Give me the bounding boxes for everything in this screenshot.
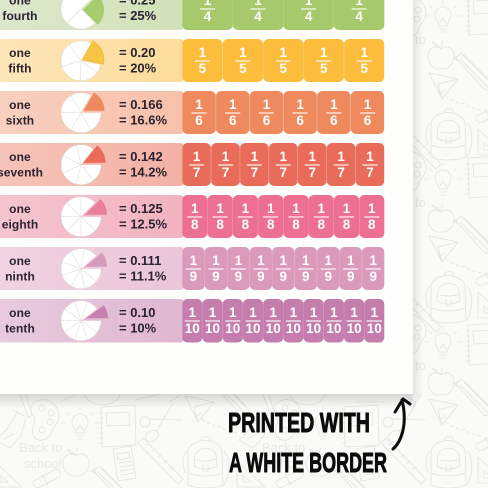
fraction bar: quarters xyxy=(182,0,384,30)
row: one seventh xyxy=(0,143,384,186)
fraction bar: tenths: 1 xyxy=(350,305,358,320)
pie: one eighth xyxy=(61,197,107,237)
fraction bar: tenths: 10 xyxy=(326,321,341,336)
background with school doodles: to xyxy=(415,195,426,210)
fraction bar: sixths: 6 xyxy=(195,113,203,128)
fraction bar: quarters: 4 xyxy=(355,9,363,24)
fraction bar: tenths: 1 xyxy=(371,305,379,320)
fraction bar: sixths: 1 xyxy=(229,97,237,112)
fraction bar: ninths: 9 xyxy=(325,269,332,284)
label: one xyxy=(9,306,31,320)
label: ninth xyxy=(5,270,35,284)
fraction bar: eighths: 8 xyxy=(216,217,224,232)
fraction bar: tenths: 10 xyxy=(225,321,240,336)
caption: printed with a white border xyxy=(228,407,387,478)
label: one xyxy=(9,150,31,164)
row band xyxy=(0,143,184,186)
fraction bar: eighths: 8 xyxy=(191,217,199,232)
pie: one fifth xyxy=(61,41,104,81)
fraction bar: sixths: 1 xyxy=(364,97,372,112)
fraction bar: ninths: 9 xyxy=(235,269,242,284)
decimal and percent: = 0.125 xyxy=(119,201,163,216)
background with school doodles: school xyxy=(24,456,62,471)
pie: one tenth xyxy=(61,301,108,341)
fraction bar: sixths xyxy=(182,91,384,134)
fraction bar: eighths: 8 xyxy=(267,217,275,232)
fraction bar: sevenths: 7 xyxy=(222,165,229,180)
fraction bar: sevenths: 1 xyxy=(222,149,230,164)
fraction bar: tenths: 1 xyxy=(249,305,257,320)
row: one fourth xyxy=(0,0,384,30)
label: one xyxy=(9,202,31,216)
fraction bar: sixths: 6 xyxy=(296,113,304,128)
fraction bar: tenths: 10 xyxy=(306,321,321,336)
fraction bar: sevenths: 7 xyxy=(308,165,316,180)
fraction bar: sevenths: 7 xyxy=(280,165,287,180)
fraction bar: quarters: 4 xyxy=(204,9,212,24)
row: one tenth xyxy=(0,299,384,342)
fraction bar: fifths: 1 xyxy=(360,45,368,60)
pie: one seventh xyxy=(61,145,106,185)
fraction bar: tenths: 10 xyxy=(367,321,382,336)
fraction bar: ninths: 1 xyxy=(280,253,288,268)
fraction bar: sixths: 6 xyxy=(364,113,372,128)
row: one ninth xyxy=(0,247,384,290)
fraction bar: ninths xyxy=(182,247,384,290)
fraction bar: sevenths: 1 xyxy=(251,149,259,164)
fraction bar: ninths: 1 xyxy=(302,253,310,268)
fraction bar: eighths: 8 xyxy=(317,217,325,232)
decimal and percent: = 25% xyxy=(119,8,157,23)
decimal and percent: = 20% xyxy=(119,60,157,76)
decimal and percent: = 14.2% xyxy=(119,164,168,180)
caption: printed with a white border: A WHITE BORDER xyxy=(229,447,387,478)
label: fourth xyxy=(2,9,38,23)
fraction bar: eighths: 1 xyxy=(317,201,325,216)
row band xyxy=(0,0,184,30)
fraction bar: sevenths xyxy=(182,143,384,186)
label: sixth xyxy=(6,114,34,128)
fraction bar: fifths: 5 xyxy=(239,61,247,76)
label: tenth xyxy=(5,322,35,336)
fraction bar: tenths: 1 xyxy=(189,305,197,320)
caption: printed with a white border: PRINTED WITH xyxy=(228,407,370,438)
fraction bar: tenths: 10 xyxy=(185,321,200,336)
fraction bar: sevenths: 7 xyxy=(337,165,345,180)
fraction bar: quarters: 4 xyxy=(254,9,262,24)
fraction bar: fifths: 5 xyxy=(360,61,368,76)
fraction bar: fifths: 1 xyxy=(320,45,328,60)
label: one xyxy=(9,254,31,268)
label: fifth xyxy=(8,62,32,76)
fraction bar: ninths: 9 xyxy=(190,269,197,284)
fraction bar: eighths xyxy=(182,195,384,238)
fraction bar: ninths: 9 xyxy=(347,269,354,284)
decimal and percent: = 0.166 xyxy=(119,97,163,112)
row: one sixth xyxy=(0,91,384,134)
row band xyxy=(0,247,184,290)
fraction bar: fifths: 5 xyxy=(280,61,288,76)
fraction bar: sixths: 1 xyxy=(330,97,338,112)
fraction bar: eighths: 1 xyxy=(292,201,300,216)
fraction bar: ninths: 9 xyxy=(369,269,377,284)
background with school doodles: school xyxy=(267,456,305,471)
fraction bar: ninths: 9 xyxy=(257,269,265,284)
fraction bar: tenths: 10 xyxy=(245,321,261,336)
background with school doodles: to xyxy=(415,358,426,373)
white paper sheet xyxy=(0,0,413,394)
decimal and percent: = 0.111 xyxy=(119,253,161,268)
fraction bar: ninths: 1 xyxy=(325,253,333,268)
decimal and percent: = 10% xyxy=(119,320,157,336)
fraction bar: ninths: 1 xyxy=(369,253,377,268)
fraction bar: tenths: 10 xyxy=(205,321,220,336)
fraction bar: fifths: 5 xyxy=(199,61,207,76)
pie: one quarter xyxy=(61,0,104,29)
fraction bar: tenths: 1 xyxy=(330,305,338,320)
fraction bar: eighths: 8 xyxy=(242,217,250,232)
fraction bar: sixths: 1 xyxy=(195,97,203,112)
fraction bar: fifths: 5 xyxy=(320,61,328,76)
row band xyxy=(0,39,184,82)
row band xyxy=(0,91,184,134)
fraction bar: sixths: 6 xyxy=(330,113,338,128)
background with school doodles: Back to xyxy=(19,440,62,455)
fraction bar: eighths: 1 xyxy=(216,201,224,216)
fraction bar: tenths: 1 xyxy=(229,305,237,320)
fraction bar: ninths: 1 xyxy=(190,253,198,268)
fraction bar: eighths: 8 xyxy=(343,217,351,232)
fraction bar: sevenths: 1 xyxy=(366,149,374,164)
fraction bar: sixths: 1 xyxy=(296,97,304,112)
paper shadow xyxy=(0,0,423,408)
fraction bar: ninths: 1 xyxy=(347,253,355,268)
fraction bar: tenths: 1 xyxy=(310,305,318,320)
label: eighth xyxy=(2,218,38,232)
fraction bar: tenths: 1 xyxy=(269,305,277,320)
fraction bar: sevenths: 1 xyxy=(280,149,288,164)
background with school doodles: to xyxy=(415,32,426,47)
fraction bar: sixths: 6 xyxy=(229,113,237,128)
fraction bar: tenths: 10 xyxy=(286,321,301,336)
fraction bar: sevenths: 7 xyxy=(366,165,374,180)
fraction bar: ninths: 9 xyxy=(280,269,287,284)
fraction bar: sevenths: 7 xyxy=(193,165,200,180)
fraction bar: eighths: 1 xyxy=(368,201,376,216)
fraction bar: sixths: 6 xyxy=(263,113,271,128)
row: one eighth xyxy=(0,195,384,238)
fraction bar: sevenths: 1 xyxy=(308,149,316,164)
fraction bar: ninths: 1 xyxy=(257,253,265,268)
fraction bar: fifths: 1 xyxy=(199,45,207,60)
fraction bar: eighths: 8 xyxy=(368,217,376,232)
fraction bar: ninths: 9 xyxy=(212,269,220,284)
fraction bar: eighths: 1 xyxy=(242,201,250,216)
fraction bar: fifths xyxy=(182,39,384,82)
fraction bar: tenths: 10 xyxy=(266,321,281,336)
row: one fifth xyxy=(0,39,384,82)
decimal and percent: = 11.1% xyxy=(119,268,167,284)
fraction bar: eighths: 1 xyxy=(191,201,199,216)
fraction bar: sevenths: 7 xyxy=(251,165,258,180)
fraction bar: tenths: 1 xyxy=(209,305,217,320)
fraction bar: tenths: 10 xyxy=(347,321,362,336)
pie: one sixth xyxy=(61,93,104,133)
label: one xyxy=(9,46,31,60)
decimal and percent: = 0.20 xyxy=(119,45,156,60)
fraction bar: ninths: 1 xyxy=(235,253,243,268)
fraction bar: ninths: 1 xyxy=(212,253,220,268)
fraction bar: eighths: 1 xyxy=(343,201,351,216)
fraction bar: quarters: 4 xyxy=(305,9,313,24)
decimal and percent: = 12.5% xyxy=(119,216,168,232)
fraction bar: sevenths: 1 xyxy=(193,149,201,164)
fraction bar: eighths: 8 xyxy=(292,217,300,232)
fraction bar: fifths: 1 xyxy=(280,45,288,60)
row band xyxy=(0,195,184,238)
fraction bar: sixths: 1 xyxy=(263,97,271,112)
decimal and percent: = 0.10 xyxy=(119,305,156,320)
fraction bar: tenths xyxy=(182,299,384,342)
row band xyxy=(0,299,184,342)
background with school doodles: Back to xyxy=(262,440,305,455)
decimal and percent: = 0.142 xyxy=(119,149,163,164)
fraction bar: sevenths: 1 xyxy=(337,149,345,164)
fraction bar: ninths: 9 xyxy=(302,269,310,284)
label: one xyxy=(9,98,31,112)
fraction bar: tenths: 1 xyxy=(290,305,298,320)
arrow pointing to the white border xyxy=(393,399,410,449)
fraction bar: eighths: 1 xyxy=(267,201,275,216)
decimal and percent: = 16.6% xyxy=(119,112,168,128)
fraction bar: fifths: 1 xyxy=(239,45,247,60)
pie: one ninth xyxy=(61,249,107,289)
